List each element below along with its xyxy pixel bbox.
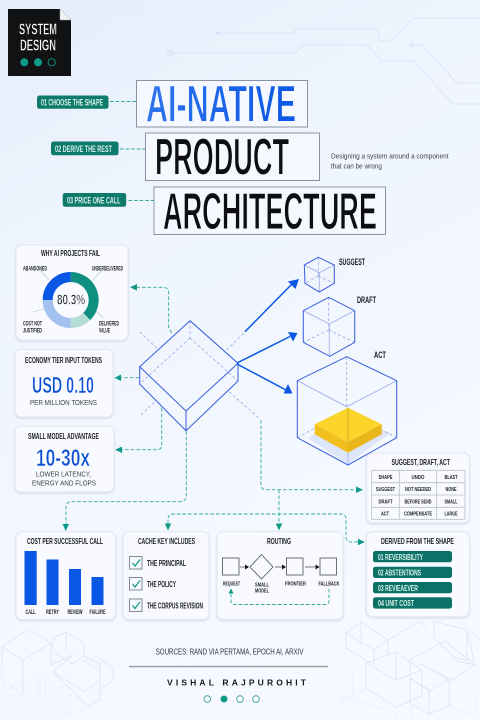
panel: cache key includes	[123, 532, 209, 620]
dot grid bottom left	[4, 686, 74, 716]
panel: cost per successful call: COST PER SUCCESSFUL CALL	[27, 537, 103, 546]
panel: cost per successful call: RETRY	[46, 610, 59, 616]
panel: small model advantage: LOWER LATENCY,	[36, 472, 91, 478]
panel: suggest draft act table: ACT	[381, 512, 389, 518]
author name: VISHAL RAJPUROHIT	[167, 678, 307, 688]
panel: routing flow	[217, 532, 343, 620]
checkbox: the corpus revision: THE CORPUS REVISION	[147, 601, 203, 610]
panel: economy tier input tokens: PER MILLION TOKENS	[30, 400, 97, 407]
bar chart	[24, 551, 104, 605]
panel: routing flow: REQUEST	[223, 582, 240, 588]
title: PRODUCT: PRODUCT	[155, 128, 289, 186]
dot grid decoration	[73, 14, 145, 68]
logo badge: system design	[8, 9, 71, 76]
circuit lines decoration	[168, 18, 480, 104]
panel: suggest draft act table: DRAFT	[378, 499, 393, 505]
panel: suggest draft act table: SUGGEST	[376, 487, 395, 493]
title: PRODUCT	[146, 128, 320, 186]
panel: economy tier input tokens: ECONOMY TIER INPUT TOKENS	[25, 356, 102, 365]
draft cube	[303, 295, 376, 356]
panel: suggest draft act table: NONE	[446, 487, 457, 493]
subtitle: that can be wrong	[331, 162, 382, 171]
panel: why AI projects fail: WHY AI PROJECTS FAIL	[41, 249, 100, 258]
panel: cache key includes: CACHE KEY INCLUDES	[138, 537, 195, 546]
step pill 01: 01 CHOOSE THE SHAPE	[41, 97, 103, 107]
panel: routing flow: SMALL	[255, 582, 269, 588]
panel: suggest draft act table: NOT NEEDED	[405, 487, 431, 493]
panel: derived from the shape: 01 REVERSIBILITY	[378, 553, 423, 562]
decorative cubes left	[2, 629, 113, 706]
donut chart	[48, 277, 94, 323]
act cube with yellow component	[297, 350, 397, 465]
central cube	[140, 321, 260, 431]
step pill 02: 02 DERIVE THE REST	[55, 144, 112, 154]
panel: suggest draft act table: SMALL	[444, 499, 458, 505]
panel: why AI projects fail: ABANDONED	[23, 265, 47, 272]
panel: cost per successful call: REVIEW	[68, 610, 83, 616]
panel: routing flow: FALLBACK	[318, 582, 340, 588]
subtitle: Designing a system around a component	[331, 152, 449, 161]
step pill 01	[37, 96, 136, 109]
panel: cost per successful call: CALL	[26, 610, 36, 616]
checkbox: the principal: THE PRINCIPAL	[147, 559, 186, 568]
panel: why AI projects fail: VALUE	[99, 327, 110, 334]
panel: derived from the shape	[366, 532, 469, 617]
panel: small model advantage	[15, 426, 114, 492]
panel: suggest draft act table: LARGE	[444, 512, 458, 518]
decorative cubes right	[340, 620, 480, 720]
panel: why AI projects fail: COST NOT	[23, 320, 42, 327]
draft cube: DRAFT	[357, 295, 376, 305]
act cube with yellow component: ACT	[374, 350, 386, 360]
checkbox: the policy: THE POLICY	[147, 580, 176, 589]
suggest cube: SUGGEST	[339, 257, 365, 267]
sources line: SOURCES: RAND VIA PERTAMA, EPOCH AI, ARXIV	[156, 646, 304, 656]
panel: small model advantage: ENERGY AND FLOPS	[32, 480, 96, 488]
panel: suggest draft act table: BEFORE SEND	[404, 499, 432, 505]
yellow block	[315, 408, 382, 453]
panel: suggest draft act table: COMPENSATE	[404, 512, 432, 518]
step pill 02	[51, 142, 145, 155]
panel: why AI projects fail: DELIVERED	[99, 320, 119, 327]
panel: small model advantage: 10-30x	[36, 445, 90, 472]
panel: routing flow: FRONTIER	[285, 582, 307, 588]
panel: why AI projects fail: JUSTIFIED	[23, 327, 42, 334]
footer rule	[129, 666, 328, 667]
connector lines teal	[62, 284, 365, 545]
panel: economy tier input tokens	[15, 350, 113, 417]
title: AI-NATIVE	[136, 75, 308, 133]
panel: derived from the shape: 03 REVIEAEVER	[378, 584, 418, 593]
panel: why AI projects fail: UNDERDELIVERED	[92, 265, 123, 272]
panel: suggest draft act table: UNDO	[412, 475, 425, 481]
panel: routing flow: MODEL	[255, 588, 269, 594]
panel: routing flow: ROUTING	[267, 537, 291, 546]
logo badge: system design: DESIGN	[20, 37, 56, 54]
panel: suggest draft act table	[367, 453, 469, 523]
step pill 03: 03 PRICE ONE CALL	[67, 195, 121, 205]
panel: suggest draft act table: BLAST	[444, 475, 458, 481]
panel: economy tier input tokens: USD 0.10	[32, 372, 94, 398]
panel: small model advantage: SMALL MODEL ADVANTAGE	[28, 432, 99, 441]
suggest cube	[304, 257, 365, 292]
panel: why AI projects fail: 80.3%	[57, 292, 85, 308]
panel: why AI projects fail	[16, 245, 128, 340]
blue arrows to cubes	[237, 279, 299, 394]
panel: derived from the shape: 04 UNIT COST	[378, 599, 414, 608]
pagination dots	[204, 696, 259, 702]
subtitle	[331, 152, 449, 171]
panel: derived from the shape: 02 ABSTENTIONS	[378, 568, 421, 577]
title: ARCHITECTURE	[154, 183, 386, 241]
title: AI-NATIVE: AI-NATIVE	[146, 75, 296, 133]
logo badge: system design: SYSTEM	[19, 21, 57, 38]
panel: cost per successful call: FAILURE	[90, 610, 106, 616]
panel: cost per successful call	[16, 532, 116, 620]
step pill 03	[63, 193, 154, 207]
panel: suggest draft act table: SHAPE	[378, 475, 393, 481]
